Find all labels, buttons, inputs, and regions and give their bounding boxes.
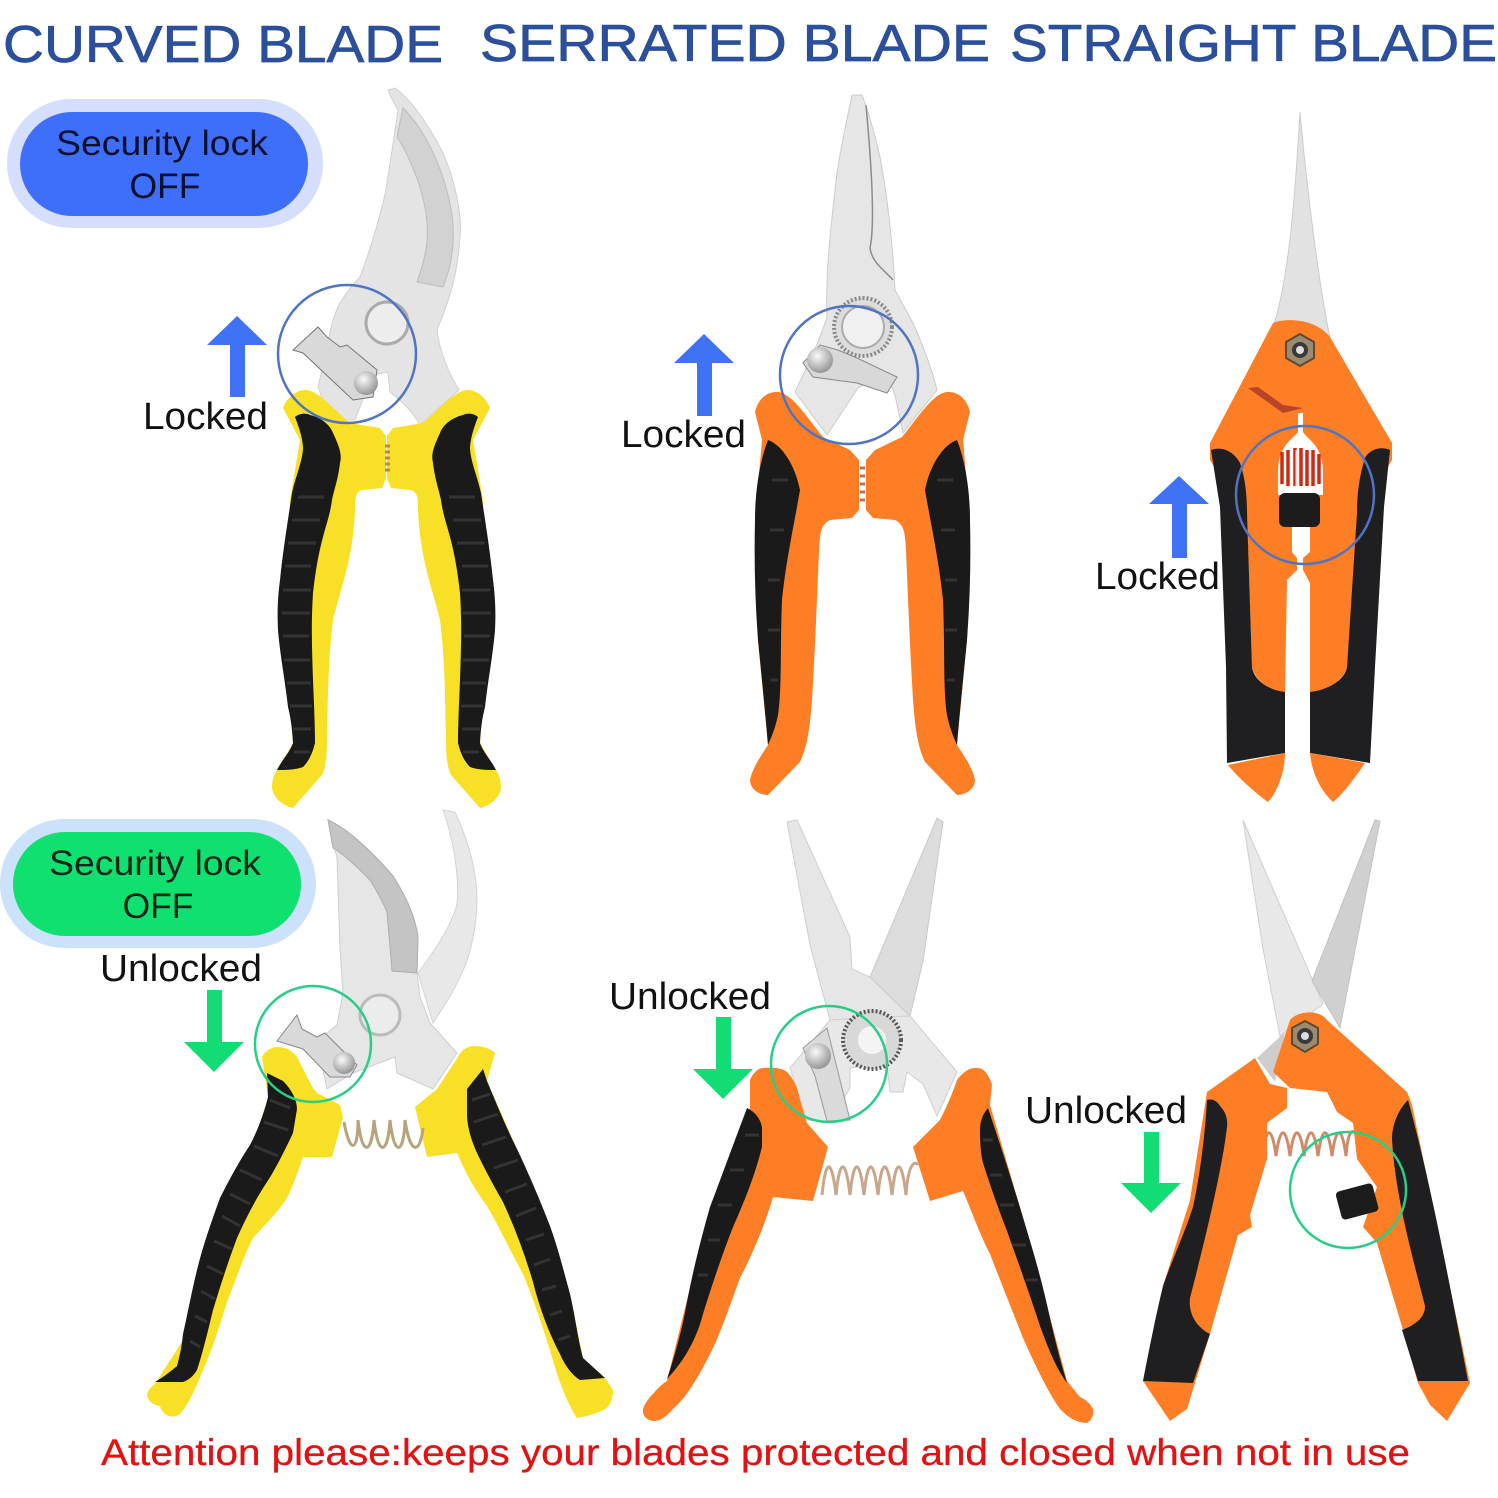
tool: serrated blade locked — [750, 95, 975, 795]
labels: locked: Locked — [621, 414, 746, 456]
labels: locked: Locked — [1095, 556, 1220, 598]
title: blade types: STRAIGHT BLADE — [1010, 15, 1497, 73]
lock highlight circles: blue — [278, 285, 1374, 564]
labels: unlocked: Unlocked — [1025, 1090, 1187, 1132]
tool: straight blade locked — [1210, 112, 1392, 802]
labels: locked — [143, 396, 1220, 598]
title: blade types: CURVED BLADE — [3, 16, 443, 74]
title: blade types — [3, 15, 1497, 74]
labels: unlocked — [100, 948, 1187, 1132]
badge: security lock green: Security lock — [49, 844, 262, 883]
tool: serrated blade unlocked — [643, 818, 1093, 1423]
tool: straight blade unlocked — [1143, 820, 1470, 1421]
badge: security lock green: OFF — [122, 887, 194, 926]
arrow: up, curved — [207, 316, 267, 397]
lock highlight circles: green — [255, 986, 1406, 1248]
badge: security lock blue — [7, 99, 323, 228]
labels: locked: Locked — [143, 396, 268, 438]
tool: curved blade unlocked — [147, 810, 613, 1418]
badge: security lock green — [0, 819, 316, 948]
arrow: up, straight — [1149, 476, 1209, 558]
tool: curved blade locked — [272, 88, 501, 808]
badge: security lock blue: Security lock — [56, 124, 269, 163]
arrow: down, serrated — [693, 1017, 753, 1099]
attention note: Attention please:keeps your blades protected and closed when not in use — [101, 1432, 1410, 1473]
badge: security lock blue: OFF — [130, 167, 200, 206]
arrow: down, straight — [1121, 1132, 1181, 1213]
arrow: up, serrated — [674, 334, 734, 416]
labels: unlocked: Unlocked — [609, 976, 771, 1018]
labels: unlocked: Unlocked — [100, 948, 262, 990]
title: blade types: SERRATED BLADE — [480, 15, 990, 73]
arrow: down, curved — [184, 990, 244, 1072]
